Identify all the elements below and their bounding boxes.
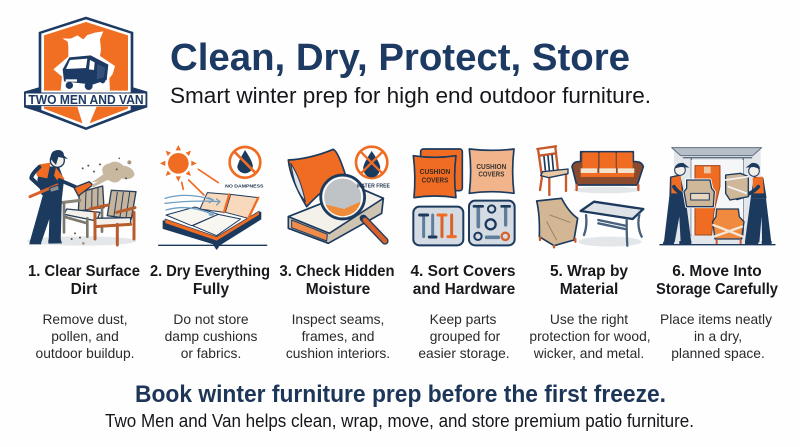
back chair: [61, 186, 104, 237]
step 6 text: planned space.: [671, 346, 765, 361]
peach cushion cover: CUSHION: [476, 164, 506, 171]
icon: cushion covers and hardware trays: [413, 149, 515, 245]
logo van: [63, 55, 108, 90]
step 6 text: Place items neatly: [660, 312, 772, 327]
magnifying glass: [321, 175, 385, 241]
step 5 text: wicker, and metal.: [533, 346, 644, 361]
step 5 text: protection for wood,: [529, 329, 651, 344]
illustration: checking moisture and sorting covers: [288, 147, 515, 245]
step 1 text: pollen, and: [51, 329, 119, 344]
step 3 text: 3. Check Hidden: [280, 263, 394, 280]
step 3 text: Moisture: [306, 281, 371, 298]
step 5 text: Material: [560, 281, 618, 298]
illustration: wrapped furniture and storage: [537, 146, 775, 247]
covered chair: [537, 198, 578, 247]
step 3 text: Inspect seams,: [292, 312, 384, 327]
title: Clean, Dry, Protect, Store: [170, 37, 630, 79]
dust cloud: [71, 157, 135, 245]
step 2 text: [150, 263, 270, 361]
step 4 text: [410, 263, 516, 361]
icon: wrapped furniture by material: [537, 146, 643, 247]
step 4 text: and Hardware: [413, 281, 516, 298]
step 5 text: 5. Wrap by: [550, 263, 628, 280]
step 5 text: [529, 263, 651, 361]
call to action text: Two Men and Van helps clean, wrap, move, and store premium patio furniture.: [105, 411, 694, 431]
right mover: [737, 163, 772, 245]
step 4 text: easier storage.: [418, 346, 510, 361]
orange cushion cover: CUSHION: [420, 169, 450, 176]
storage unit: [672, 148, 762, 244]
subtitle: Smart winter prep for high end outdoor furniture.: [170, 83, 651, 108]
wooden chair: [537, 146, 568, 195]
worker: [29, 150, 115, 244]
step 1 text: Remove dust,: [42, 312, 128, 327]
orange cushion cover: COVERS: [422, 177, 449, 184]
step 4 text: grouped for: [430, 329, 501, 344]
step 4 text: 4. Sort Covers: [410, 263, 516, 280]
step 4 text: Keep parts: [430, 312, 496, 327]
step 1 text: Dirt: [71, 281, 97, 298]
icon: drying cushion with sun and no dampness: [159, 145, 267, 249]
step 6 text: Storage Carefully: [656, 281, 778, 298]
peach cushion cover: [469, 149, 514, 193]
sunlounger cushions: [163, 193, 261, 249]
step 2 text: 2. Dry Everything: [150, 263, 270, 280]
no water sign: NO DAMPNESS: [225, 183, 264, 189]
step 5 text: Use the right: [550, 312, 628, 327]
call to action heading: Book winter furniture prep before the first freeze.: [135, 381, 666, 408]
icon: worker brushing chairs: [27, 150, 137, 246]
icon: movers loading storage unit: [660, 148, 775, 245]
step 3 text: cushion interiors.: [286, 346, 390, 361]
orange cushion cover: [413, 156, 456, 198]
step 1 text: [28, 263, 140, 361]
hardware tray: screws: [413, 207, 463, 245]
step 3 text: frames, and: [302, 329, 374, 344]
wind lines: [165, 195, 220, 215]
beige armchair: [684, 180, 714, 207]
logo: Two Men and Van: [24, 17, 147, 130]
peach cushion cover: COVERS: [478, 172, 505, 179]
illustration: worker cleaning chairs and drying cushions: [27, 145, 267, 249]
wrapped orange armchair: [713, 209, 744, 243]
step 6 text: 6. Move Into: [672, 263, 762, 280]
step 2 text: Do not store: [173, 312, 249, 327]
wicker sofa: [572, 152, 643, 190]
step 1 text: outdoor buildup.: [36, 346, 134, 361]
wrapped box: [726, 173, 748, 200]
left mover: [663, 163, 695, 245]
step 3 text: [280, 263, 394, 361]
logo wordmark: TWO MEN AND VAN: [28, 92, 144, 107]
icon: cushion under magnifying glass: [288, 147, 390, 243]
step 2 text: or fabrics.: [181, 346, 241, 361]
logo silhouettes of two men: [53, 31, 115, 91]
hardware tray: bolts and nuts: [469, 201, 515, 245]
step 1 text: 1. Clear Surface: [28, 263, 140, 280]
step 6 text: in a dry,: [694, 329, 742, 344]
step 2 text: Fully: [193, 281, 229, 298]
no water sign: WATER FREE: [357, 184, 390, 190]
sun: [160, 145, 218, 195]
front chair: [90, 190, 136, 245]
step 6 text: [656, 263, 778, 361]
step 2 text: damp cushions: [165, 329, 257, 344]
metal table: [581, 202, 643, 246]
